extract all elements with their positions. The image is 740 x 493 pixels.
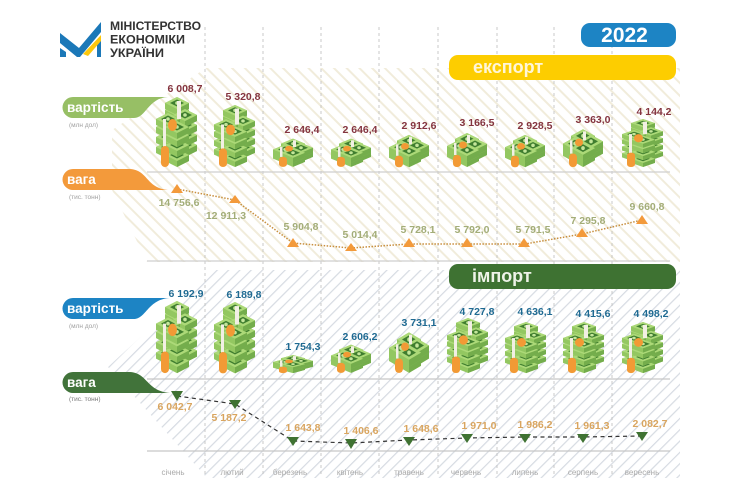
line chart: export weight: 5 904,8 [283,221,319,233]
label: export weight: вага [67,172,96,187]
export value numbers: 4 144,2 [636,106,672,118]
export value numbers: 2 646,4 [284,124,320,136]
month axis labels: січень [162,468,184,477]
line chart: export weight: 9 660,8 [629,201,665,213]
label: export value [62,97,168,129]
line chart: import weight: 1 971,0 [461,420,497,432]
icon: ministry logo mark [60,22,101,57]
export value numbers: 3 166,5 [459,117,495,129]
month axis labels: травень [394,468,424,477]
import value numbers: 4 727,8 [459,306,495,318]
export value numbers: 5 320,8 [225,91,261,103]
heading: import [449,264,676,289]
line chart: export weight: 14 756,6 [159,197,200,209]
line chart: import weight: 1 986,2 [517,419,553,431]
import value numbers: 6 189,8 [226,289,262,301]
month axis labels: березень [273,468,307,477]
import value numbers: 1 754,3 [285,341,321,353]
label: export weight [62,169,168,201]
month axis labels: лютий [220,468,244,477]
year badge: 2022 [601,24,648,47]
logo text: МІНІСТЕРСТВО [110,21,201,33]
line chart: import weight: 5 187,2 [211,412,247,424]
label: export value: (млн дол) [69,122,98,129]
label: import value: вартість [67,301,123,316]
month axis labels: квітень [337,468,363,477]
line chart: import weight: 1 643,8 [285,422,321,434]
heading: import: імпорт [472,266,532,286]
line chart: export weight [159,184,665,251]
export value numbers: 3 363,0 [575,114,611,126]
import value numbers: 2 606,2 [342,331,378,343]
export value numbers: 2 646,4 [342,124,378,136]
line chart: import weight: 2 082,7 [632,418,668,430]
line chart: export weight: 5 792,0 [454,224,490,236]
month axis labels: липень [512,468,538,477]
chart: export value money stacks [156,97,663,167]
export value numbers: 2 928,5 [517,120,553,132]
label: import weight [62,372,170,403]
logo: ministry of economy: ЕКОНОМІКИ [110,34,185,46]
import value numbers: 4 636,1 [517,306,553,318]
label: import weight: вага [67,375,96,390]
logo: ministry of economy: УКРАЇНИ [110,47,164,60]
heading: export: експорт [473,57,543,77]
import value numbers: 4 498,2 [633,308,669,320]
line chart: import weight [157,391,668,449]
month axis labels: червень [451,468,481,477]
panel: export hatched background [112,68,680,262]
import value numbers [168,288,669,353]
export value numbers [167,83,672,136]
label: export weight: (тис. тонн) [69,194,100,201]
import value numbers: 3 731,1 [401,317,437,329]
export value numbers: 6 008,7 [167,83,203,95]
month axis labels: вересень [625,468,659,477]
label: export value: вартість [67,100,123,115]
panel: import hatched background [108,270,680,478]
line chart: export weight: 5 791,5 [515,224,551,236]
line chart: export weight: 12 911,3 [206,210,246,222]
chart: import value money stacks [156,301,663,373]
line chart: export weight: 5 728,1 [400,224,436,236]
line chart: import weight: 1 648,6 [403,423,439,435]
label: import value [62,298,170,330]
line chart: export weight: 7 295,8 [570,215,606,227]
line chart: export weight: 5 014,4 [342,229,378,241]
import value numbers: 6 192,9 [168,288,204,300]
line chart: import weight: 1 406,6 [343,425,379,437]
year badge [581,23,676,47]
month axis labels [162,468,659,477]
line chart: import weight: 6 042,7 [157,401,193,413]
label: import value: (млн дол) [69,323,98,330]
line chart: import weight: 1 961,3 [574,420,610,432]
export value numbers: 2 912,6 [401,120,437,132]
label: import weight: (тис. тонн) [69,396,100,403]
heading: export [449,55,676,80]
logo: ministry of economy [60,21,201,60]
import value numbers: 4 415,6 [575,308,611,320]
month axis labels: серпень [568,468,598,477]
